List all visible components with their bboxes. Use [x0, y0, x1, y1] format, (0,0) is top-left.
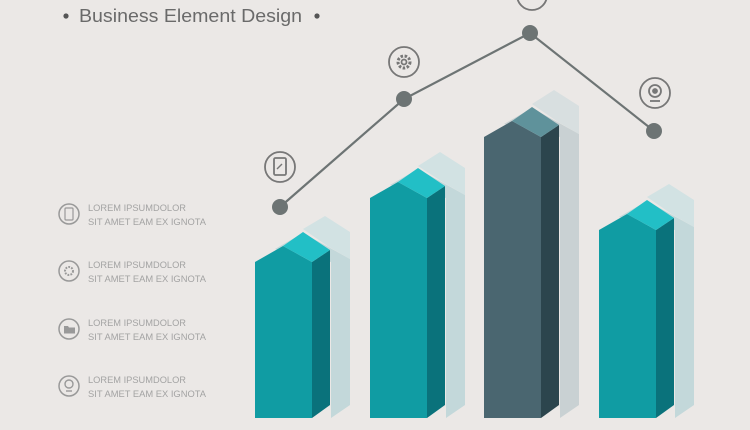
legend item 3: LOREM IPSUMDOLOR [88, 318, 187, 328]
title: Business Element Design [79, 6, 302, 26]
bar 3 [484, 90, 579, 418]
icon: webcam [640, 78, 670, 108]
legend item 3 [59, 318, 206, 342]
bar 2 [370, 152, 465, 418]
bar 1 [255, 216, 350, 418]
legend item 4 [59, 375, 206, 399]
legend item 4: SIT AMET EAM EX IGNOTA [88, 389, 206, 399]
legend item 1 [59, 203, 206, 227]
line chart [272, 25, 662, 215]
legend item 1: SIT AMET EAM EX IGNOTA [88, 217, 206, 227]
bar 4 [599, 184, 694, 418]
icon: top circle [517, 0, 547, 10]
legend item 1: LOREM IPSUMDOLOR [88, 203, 187, 213]
legend item 3: SIT AMET EAM EX IGNOTA [88, 332, 206, 342]
icon: gear [389, 47, 419, 77]
icon: tablet [265, 152, 295, 182]
legend item 2 [59, 260, 206, 284]
legend item 4: LOREM IPSUMDOLOR [88, 375, 187, 385]
legend item 2: LOREM IPSUMDOLOR [88, 260, 187, 270]
legend item 2: SIT AMET EAM EX IGNOTA [88, 274, 206, 284]
